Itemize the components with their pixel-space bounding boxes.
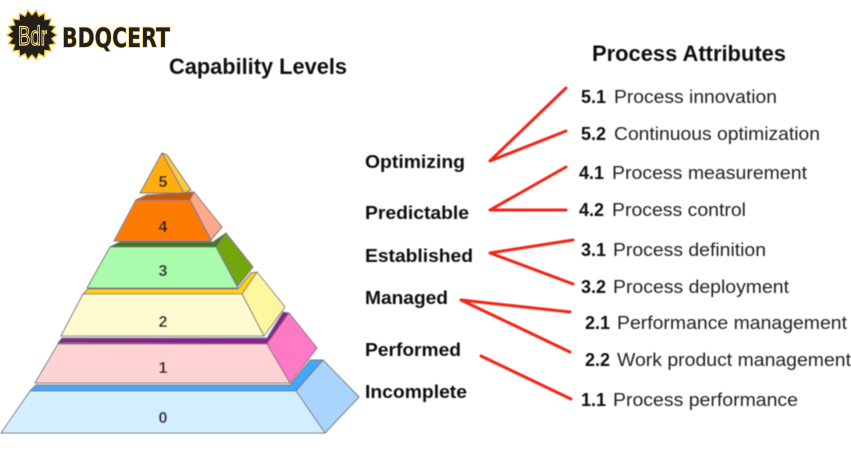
attribute 2.1: 2.1 (585, 313, 610, 333)
capability level labels (365, 152, 473, 402)
attribute 5.2: Continuous optimization (614, 124, 820, 144)
label: managed: Managed (365, 288, 448, 308)
attribute 2.1: Performance management (617, 313, 847, 333)
pyramid chart (1, 153, 359, 433)
attribute 1.1: 1.1 (581, 390, 606, 410)
attribute 4.1: Process measurement (612, 163, 807, 183)
level 0: 0 (159, 410, 168, 427)
level 3: 3 (159, 263, 168, 280)
level 5 (140, 153, 191, 193)
logo: BDQCERT (7, 10, 170, 60)
label: incomplete: Incomplete (365, 382, 467, 402)
heading: process attributes: Process Attributes (592, 41, 786, 66)
level 2: 2 (159, 314, 168, 331)
attribute 3.1: 3.1 (581, 240, 606, 260)
attribute 2.2: 2.2 (585, 350, 610, 370)
connector lines (461, 88, 573, 399)
heading: capability levels: Capability Levels (169, 54, 347, 79)
attribute 3.2: 3.2 (581, 277, 606, 297)
level 2 (61, 272, 285, 336)
attribute 2.2: Work product management (617, 350, 851, 370)
level 5: 5 (159, 174, 168, 191)
label: optimizing: Optimizing (365, 152, 465, 172)
label: predictable: Predictable (365, 203, 469, 223)
connector: managed (461, 300, 570, 352)
level 4 (114, 192, 222, 241)
level 4: 4 (159, 219, 168, 236)
level 1 (35, 312, 317, 383)
attribute 4.1: 4.1 (579, 163, 604, 183)
level 3 (87, 233, 253, 288)
attribute 3.2: Process deployment (613, 277, 789, 297)
attribute 3.1: Process definition (613, 240, 766, 260)
connector: optimizing (490, 88, 566, 161)
attribute 5.1: Process innovation (614, 87, 777, 107)
attribute 4.2: 4.2 (579, 200, 604, 220)
logo wordmark: BDQCERT (62, 23, 170, 54)
attribute 4.2: Process control (612, 200, 746, 220)
icon: sunburst badge (7, 10, 57, 60)
level 0 (1, 360, 359, 433)
label: established: Established (365, 246, 473, 266)
attribute 5.2: 5.2 (581, 124, 606, 144)
attribute 5.1: 5.1 (581, 87, 606, 107)
level 1: 1 (159, 360, 168, 377)
connector: performed (481, 356, 571, 399)
label: performed: Performed (365, 340, 461, 360)
process attribute list (579, 87, 851, 410)
icon: sunburst badge: Bdr (18, 21, 47, 51)
connector: predictable (490, 167, 566, 210)
connector: established (490, 240, 573, 284)
attribute 1.1: Process performance (613, 390, 798, 410)
